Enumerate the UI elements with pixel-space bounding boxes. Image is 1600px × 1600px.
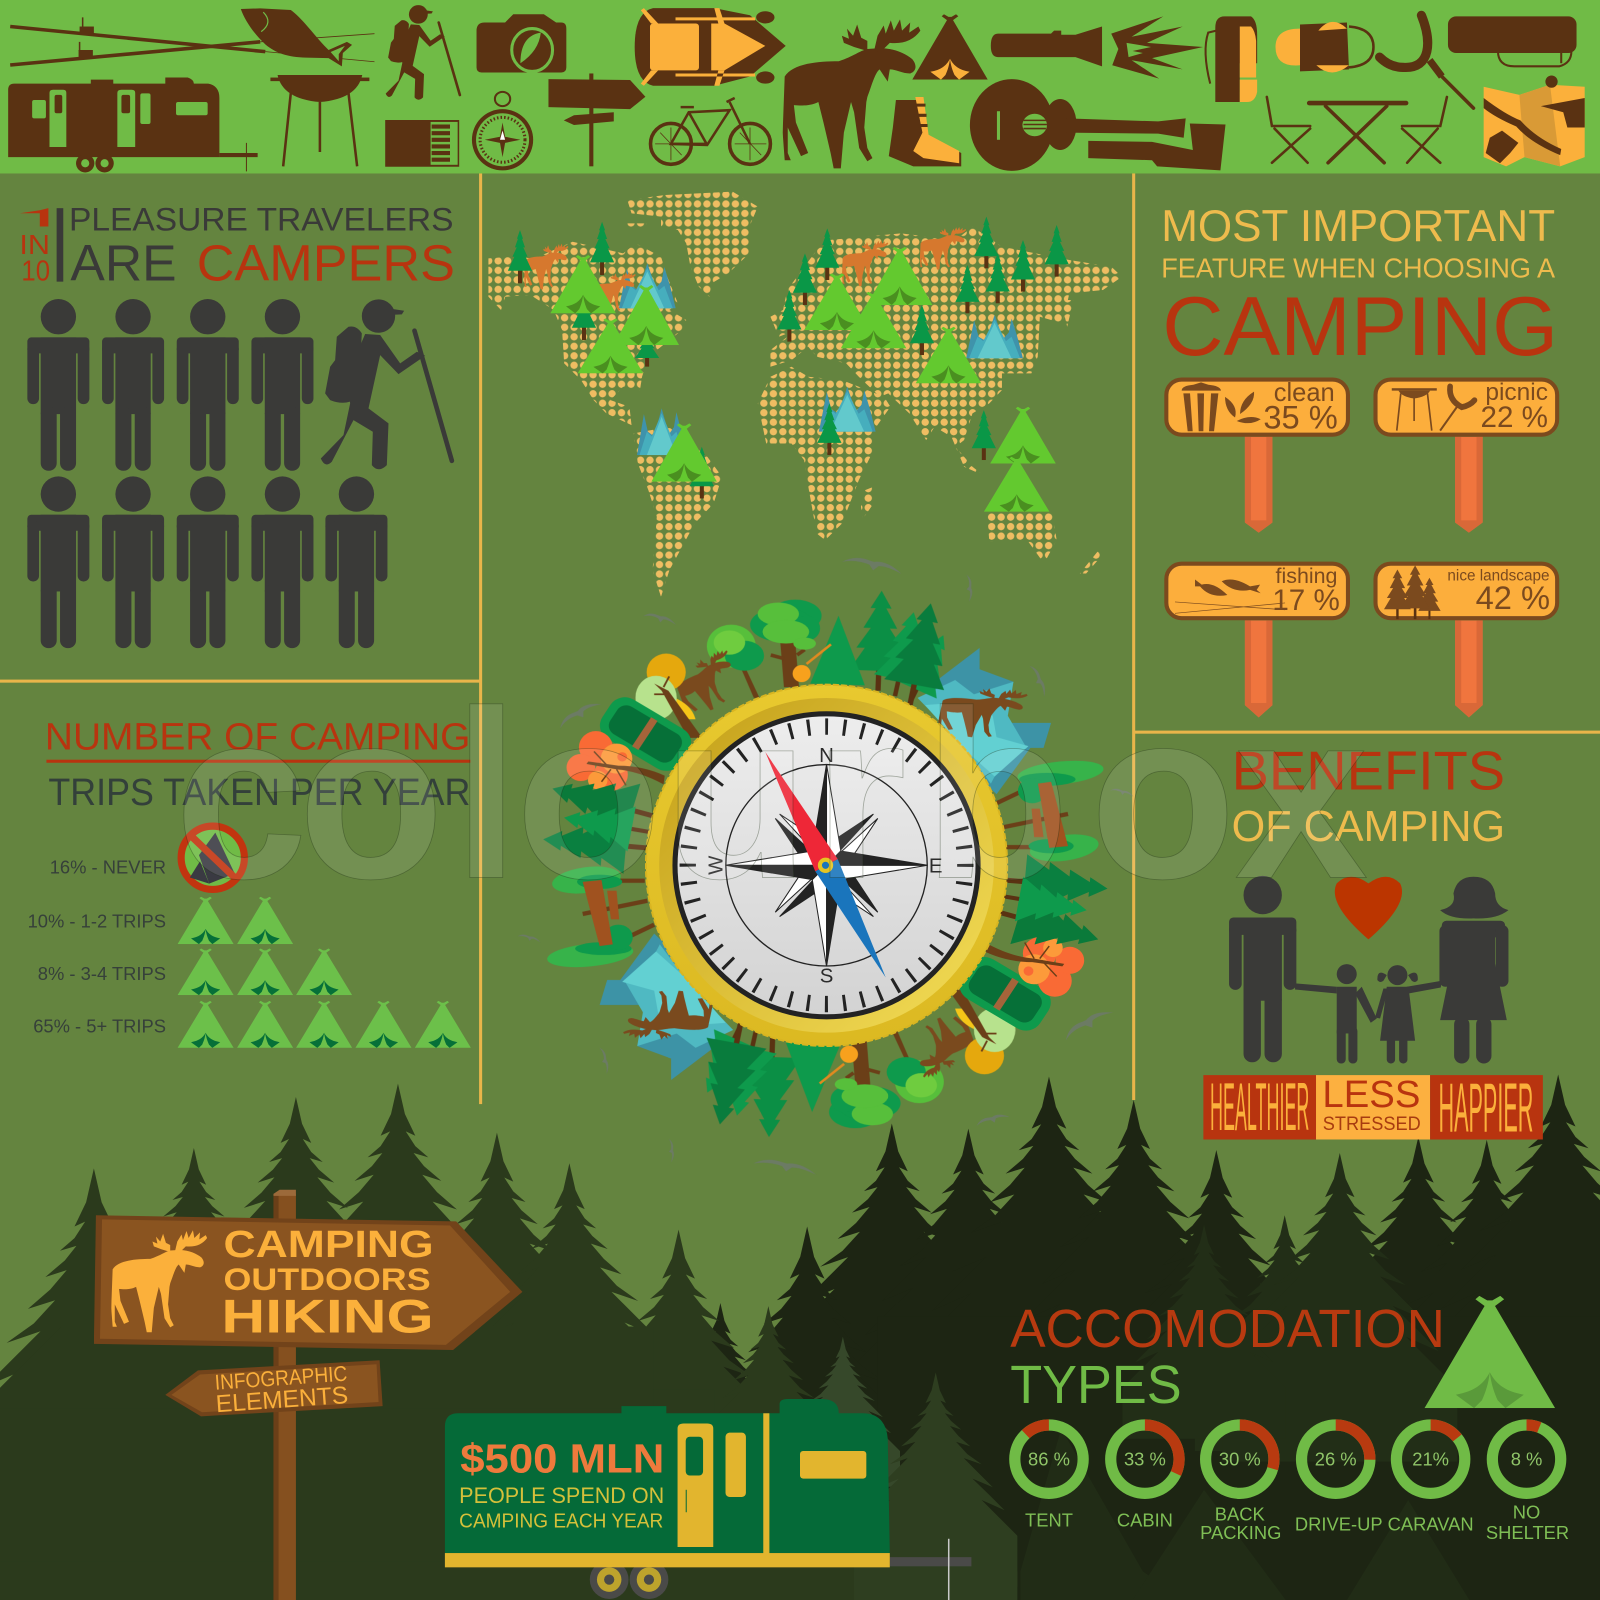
forest silhouette [0, 1074, 1600, 1600]
icon: bicycle [651, 98, 770, 164]
trailer trim [445, 1413, 890, 1567]
main sign board: HIKING [221, 1291, 434, 1343]
pictogram: nine people and a hiker [27, 299, 452, 648]
icon: campfire [1111, 16, 1203, 79]
icon: big tent [1424, 1296, 1555, 1408]
icon: hiker [386, 5, 460, 100]
heading: 1 in 10: 10 [21, 256, 50, 288]
sign: nice landscape [1376, 564, 1557, 717]
icon: backpack [1206, 16, 1257, 102]
small sign board [165, 1360, 383, 1418]
heading: trips taken per year: TRIPS TAKEN PER YEAR [48, 771, 470, 813]
main sign board: OUTDOORS [223, 1261, 431, 1297]
row: 3-4 trips: 8% - 3-4 TRIPS [38, 963, 166, 984]
donut: caravan [1388, 1425, 1474, 1535]
heading: number of camping: NUMBER OF CAMPING [45, 715, 470, 757]
donut: no shelter: NO [1513, 1501, 1540, 1522]
trailer text: $500 MLN [460, 1435, 664, 1481]
donut: no shelter: 8 % [1511, 1448, 1542, 1469]
donut: back packing: 30 % [1219, 1448, 1261, 1469]
donut: cabin: 33 % [1124, 1448, 1166, 1469]
icon: grill [270, 75, 369, 166]
sign: picnic: 22 % [1481, 401, 1548, 434]
signpost [94, 1190, 522, 1600]
sign: nice landscape: 42 % [1476, 579, 1550, 616]
icon: guitar [970, 79, 1186, 171]
dotted world map [482, 176, 1133, 604]
family pictogram [1229, 876, 1508, 1063]
icon: sausage on fork [1380, 15, 1473, 108]
sign: picnic: picnic [1485, 379, 1548, 406]
compass letters: E [929, 855, 943, 877]
row: never [50, 826, 244, 889]
icon: folded map [1484, 76, 1585, 166]
donut: drive-up: DRIVE-UP [1295, 1514, 1383, 1535]
icon: folding table and chairs [1267, 97, 1447, 163]
sign: nice landscape: nice landscape [1447, 568, 1549, 585]
sign: clean: 35 % [1263, 399, 1338, 436]
tent [810, 616, 865, 685]
heading: most important: MOST IMPORTANT [1161, 200, 1555, 251]
compass letters: S [820, 966, 833, 988]
heading: campers: CAMPERS [197, 235, 455, 292]
donut: no shelter [1486, 1425, 1569, 1543]
icon: fishing rods [10, 17, 374, 65]
panel: most important feature [1161, 200, 1558, 717]
compass letters [705, 745, 943, 988]
guitar [793, 644, 831, 682]
icon: lantern [1276, 22, 1373, 72]
heading: 1 in 10 [19, 208, 50, 288]
sign: clean [1166, 379, 1348, 533]
watermark: colourbox [174, 661, 1368, 929]
donut: drive-up [1295, 1425, 1383, 1535]
icon: fish [241, 8, 352, 66]
tree [750, 600, 822, 687]
benefits banner: HEALTHIER [1210, 1070, 1309, 1145]
heading: accomodation: ACCOMODATION [1010, 1299, 1445, 1359]
heading: benefits: BENEFITS [1232, 739, 1505, 801]
donut: cabin [1111, 1425, 1179, 1531]
heading: 1 in 10: IN [19, 229, 50, 260]
donut: cabin: CABIN [1117, 1510, 1173, 1531]
donut: back packing [1200, 1425, 1281, 1543]
heading: camping: CAMPING [1162, 279, 1558, 373]
icon: inflatable boat [635, 8, 786, 86]
benefits banner: LESS [1322, 1073, 1420, 1115]
donut: back packing: BACK [1215, 1503, 1266, 1524]
panel: benefits of camping [1203, 739, 1543, 1147]
light green tree [707, 625, 764, 698]
icon: axe [1088, 123, 1226, 170]
main sign board: CAMPING [223, 1223, 434, 1265]
compass letters: N [819, 745, 834, 767]
panel: 1 in 10 are campers [19, 201, 455, 648]
top icon band [0, 0, 1600, 173]
row: 1-2 trips: 10% - 1-2 TRIPS [28, 910, 166, 931]
island tree [997, 757, 1105, 865]
trailer: $500 mln: PEOPLE SPEND ON [459, 1483, 664, 1508]
compass star [726, 764, 928, 966]
sign: picnic [1376, 379, 1557, 533]
compass [646, 685, 1007, 1046]
sign: fishing [1166, 564, 1348, 717]
donut: tent [1001, 1411, 1097, 1531]
donut: tent: TENT [1025, 1510, 1073, 1531]
icon: sleeping mat [1448, 16, 1577, 66]
heading: of camping: OF CAMPING [1232, 802, 1505, 851]
icon: signpost [548, 73, 645, 166]
sign: clean: clean [1274, 379, 1335, 407]
pine markers [508, 217, 1069, 498]
heading: types: TYPES [1010, 1355, 1182, 1415]
icon: heart [1335, 877, 1402, 939]
trailer: $500 mln: CAMPING EACH YEAR [459, 1511, 663, 1533]
compass dial [678, 716, 976, 1014]
post [273, 1190, 296, 1600]
mountains [619, 263, 1023, 455]
panel: number of camping trips [28, 715, 471, 1048]
icon: moose [783, 19, 920, 168]
compass letters: W [705, 855, 727, 875]
icon: boot [889, 97, 961, 166]
donut: caravan: CARAVAN [1388, 1514, 1474, 1535]
heading: feature when choosing: FEATURE WHEN CHOOSING A [1161, 253, 1556, 284]
compass needle [765, 752, 886, 978]
divider lines [0, 173, 1600, 1104]
icon: camera [477, 14, 566, 72]
row: 5+ trips: 65% - 5+ TRIPS [33, 1015, 166, 1036]
boat [594, 691, 698, 777]
horse moose [668, 648, 747, 718]
benefits banner: STRESSED [1323, 1113, 1421, 1135]
compass ring of scenery [541, 590, 1110, 1138]
donut: drive-up: 26 % [1315, 1448, 1357, 1469]
moose markers [524, 227, 966, 313]
icon: pocket compass [472, 92, 533, 170]
panel: accommodation types [1001, 1296, 1569, 1543]
wheels [590, 1560, 668, 1599]
row: 1-2 trips [28, 897, 293, 944]
trailer body [445, 1399, 890, 1553]
orange tree [566, 731, 665, 791]
donut: no shelter: SHELTER [1486, 1522, 1569, 1543]
birds [517, 558, 1133, 1175]
icon: flashlight [991, 27, 1102, 66]
icon: teepee [912, 14, 988, 80]
sign: fishing: 17 % [1272, 584, 1340, 617]
left pines [541, 762, 660, 875]
heading bar [57, 208, 63, 282]
tent markers [550, 247, 1056, 512]
mountains with moose [918, 648, 1051, 794]
row: 3-4 trips [38, 948, 352, 995]
icon: matches [385, 120, 459, 167]
donut: back packing: PACKING [1200, 1522, 1281, 1543]
small sign board: ELEMENTS [215, 1382, 349, 1418]
yellow tree [635, 654, 702, 738]
pine cluster [849, 590, 963, 712]
main sign board [94, 1215, 522, 1350]
heading: are: ARE [70, 235, 177, 292]
icon: trailer [8, 78, 258, 172]
row: never: 16% - NEVER [50, 856, 166, 877]
mirrored half of scenery [546, 853, 1110, 1138]
heading: pleasure travelers: PLEASURE TRAVELERS [69, 201, 453, 238]
hitch [890, 1539, 971, 1600]
sign: fishing: fishing [1276, 564, 1337, 588]
map markers [508, 217, 1069, 512]
donut: tent: 86 % [1028, 1448, 1070, 1469]
compass bezel [646, 685, 1007, 1046]
row: 5+ trips [33, 1001, 471, 1048]
small sign board: INFOGRAPHIC [214, 1362, 348, 1395]
donut: caravan: 21% [1412, 1448, 1449, 1469]
trailer: $500 mln [445, 1399, 971, 1600]
